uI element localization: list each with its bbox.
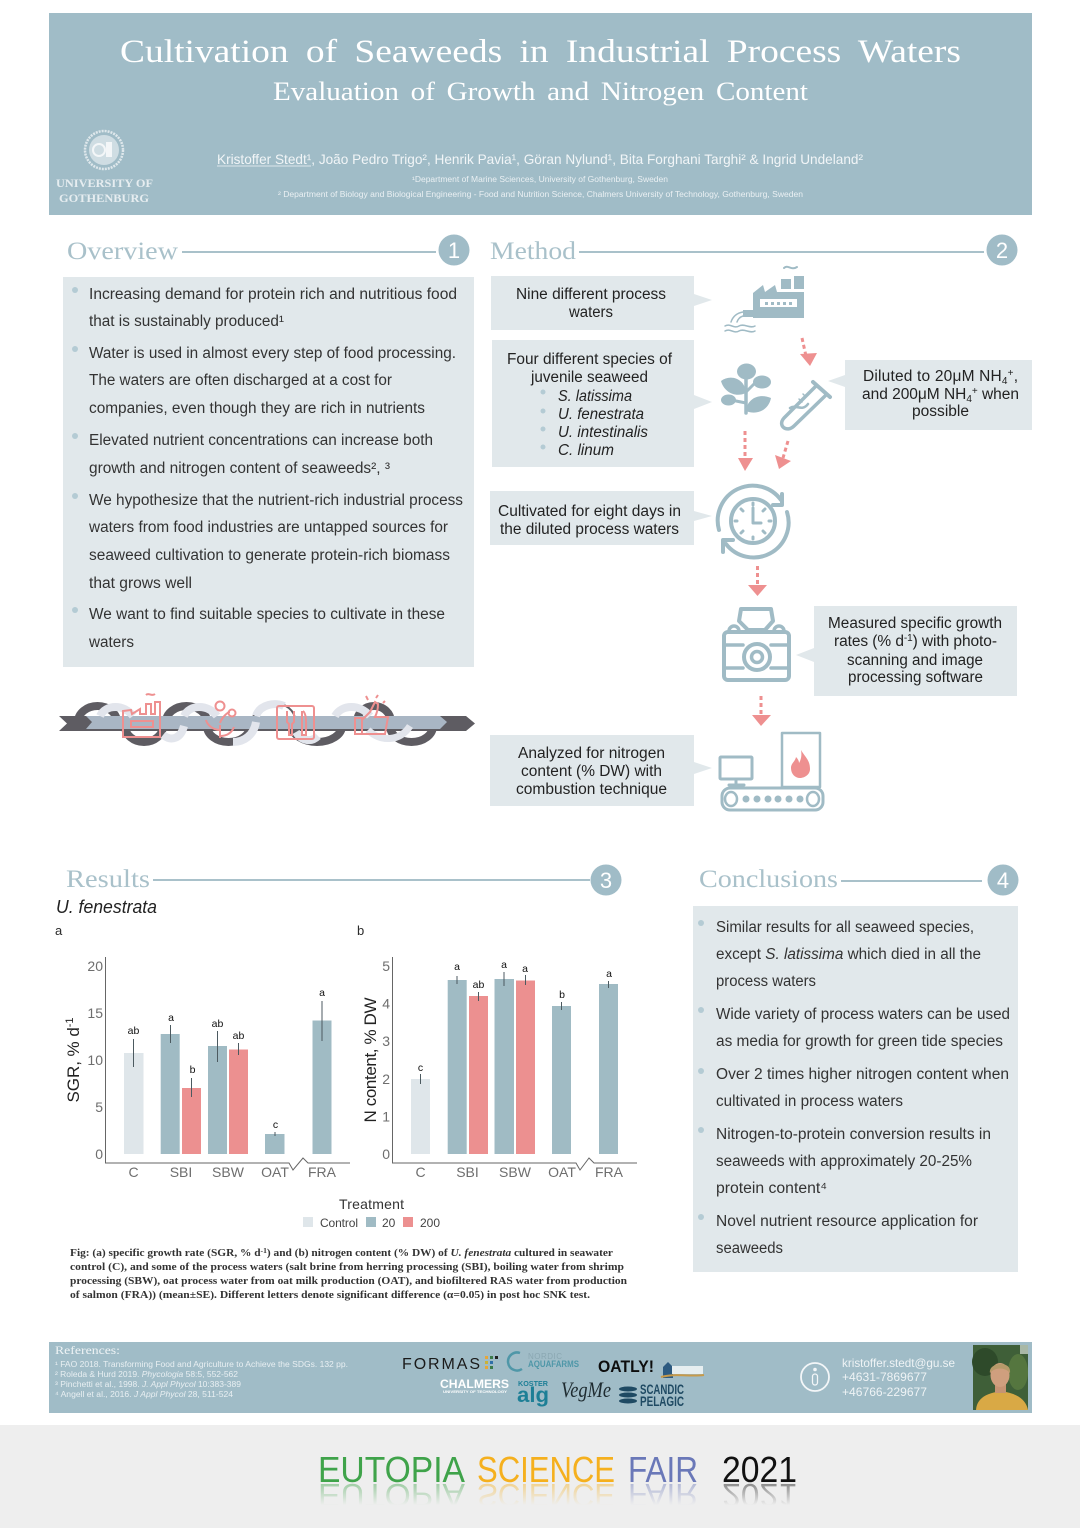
panel: overview: companies, even though they are rich in nutrients <box>89 400 425 417</box>
panel: overview: that is sustainably produced¹ <box>89 313 284 330</box>
heading: overview <box>67 234 470 266</box>
method box: species: U. intestinalis <box>558 424 648 441</box>
panel: overview: Elevated nutrient concentrations can increase both <box>89 432 433 449</box>
heading: method: Method <box>490 238 577 265</box>
arrow: factory to tube <box>800 338 817 366</box>
chart b: nitrogen content: b <box>559 989 565 1001</box>
event title: 2021 <box>722 1449 797 1490</box>
panel: overview: Water is used in almost every step of food processing. <box>89 345 456 362</box>
chart a: specific growth rate: c <box>273 1119 278 1131</box>
figure caption: of salmon (FRA)) (mean±SE). Different letters denote significant difference (α=0.05) in post hoc SNK test. <box>70 1290 590 1301</box>
figure caption: ) and (b) nitrogen content (% DW) of <box>267 1248 451 1259</box>
chart a: specific growth rate: ab <box>128 1025 139 1037</box>
chart b: nitrogen content: 5 <box>382 958 390 974</box>
icon: factory with outflow <box>725 267 804 332</box>
figure caption: processing (SBW), oat process water from oat milk production (OAT), and biofiltered RAS water from production <box>70 1276 627 1287</box>
panel: overview: growth and nitrogen content of seaweeds², ³ <box>89 460 390 477</box>
references: ⁴ Angell et al., 2016. J Appl Phycol 28, 511-524 <box>55 1390 234 1399</box>
chart a: specific growth rate: ab <box>212 1018 223 1030</box>
partner logos: CHALMERS <box>440 1377 509 1391</box>
method box: growth rates: -1 <box>904 633 913 644</box>
chart legend <box>303 1196 440 1230</box>
panel: overview: Increasing demand for protein rich and nutritious food <box>89 286 457 303</box>
university logo <box>56 131 153 205</box>
panel: overview: We hypothesize that the nutrient-rich industrial process <box>89 492 463 509</box>
heading: overview: 1 <box>448 238 460 263</box>
chart a: specific growth rate: 0 <box>95 1146 103 1162</box>
chart a: specific growth rate: 15 <box>87 1005 103 1021</box>
panel: conclusions: seaweeds <box>716 1240 783 1257</box>
chart a: specific growth rate: SBI <box>170 1164 192 1180</box>
panel: conclusions: process waters <box>716 973 816 990</box>
university logo: UNIVERSITY OF <box>56 176 153 190</box>
figure caption: Fig: (a) specific growth rate (SGR, % d <box>70 1248 246 1259</box>
header banner <box>49 13 1032 215</box>
heading: conclusions: Conclusions <box>699 866 838 893</box>
chart b: nitrogen content: a <box>454 961 460 973</box>
event title: EUTOPIA <box>318 1476 465 1512</box>
subtitle: Evaluation of Growth and Nitrogen Content <box>273 77 809 106</box>
chart legend: 20 <box>382 1216 396 1230</box>
panel: conclusions: as media for growth for green tide species <box>716 1033 1003 1050</box>
method box: nitrogen analysis: combustion technique <box>516 781 667 798</box>
panel: overview: that grows well <box>89 575 192 592</box>
method box: growth rates: processing software <box>848 669 983 686</box>
chart legend: Control <box>320 1216 358 1230</box>
references: ² Roleda & Hurd 2019. Phycologia 58:5, 552-562 <box>55 1370 239 1379</box>
footer bar <box>49 1342 1032 1413</box>
chart b: nitrogen content: b <box>357 923 364 938</box>
chart a: specific growth rate: 10 <box>87 1052 103 1068</box>
panel: conclusions: Nitrogen-to-protein conversion results in <box>716 1126 991 1143</box>
references <box>55 1343 348 1399</box>
method box: nitrogen analysis: Analyzed for nitrogen <box>518 745 665 762</box>
panel: overview <box>63 277 474 667</box>
event title: FAIR <box>628 1449 698 1490</box>
method box: dilution: , <box>1014 368 1018 385</box>
panel: conclusions: protein content⁴ <box>716 1180 827 1197</box>
method box: growth rates: scanning and image <box>847 652 983 669</box>
panel: conclusions: except S. latissima which died in all the <box>716 946 981 963</box>
chart a: specific growth rate: 5 <box>95 1099 103 1115</box>
panel: conclusions: Over 2 times higher nitrogen content when <box>716 1066 1009 1083</box>
chart b: nitrogen content: a <box>606 968 612 980</box>
partner logos: KOSTER <box>518 1381 548 1388</box>
event title: 2021 <box>722 1476 797 1512</box>
contact details: kristoffer.stedt@gu.se <box>842 1356 955 1370</box>
chart b: nitrogen content: 3 <box>382 1033 390 1049</box>
method box: species: S. latissima <box>558 388 632 405</box>
chart a: specific growth rate: a <box>319 987 325 999</box>
icon: clock cycle <box>718 486 789 557</box>
chart a: specific growth rate: -1 <box>64 1018 76 1027</box>
panel: conclusions: Wide variety of process waters can be used <box>716 1006 1010 1023</box>
bottom band <box>0 1425 1080 1528</box>
chart a: specific growth rate: a <box>168 1012 174 1024</box>
method box: growth rates <box>796 606 1017 696</box>
arrow: camera to analyser <box>752 696 771 726</box>
figure caption: -1 <box>261 1247 267 1255</box>
chart b: nitrogen content: FRA <box>595 1164 624 1180</box>
university logo: GOTHENBURG <box>59 191 149 205</box>
partner logos: VegMe <box>561 1377 611 1402</box>
panel: overview: The waters are often discharged at a cost for <box>89 372 392 389</box>
heading: results: Results <box>66 866 150 893</box>
chart b: nitrogen content: OAT <box>548 1164 576 1180</box>
heading: method: 2 <box>996 238 1008 263</box>
heading: overview: Overview <box>67 238 178 265</box>
chart a: specific growth rate: OAT <box>261 1164 289 1180</box>
chart b: nitrogen content <box>357 923 637 1180</box>
affiliation 2: ² Department of Biology and Biological Engineering - Food and Nutrition Science, Chalmers University of Technology, Gothenburg, Sweden <box>278 190 803 199</box>
method box: species: U. fenestrata <box>558 406 644 423</box>
event title: SCIENCE <box>477 1449 615 1490</box>
icon: camera <box>724 609 789 680</box>
panel: overview: We want to find suitable species to cultivate in these <box>89 606 445 623</box>
partner logos: UNIVERSITY OF TECHNOLOGY <box>443 1389 507 1394</box>
contact details: +4631-7869677 <box>842 1370 927 1384</box>
event title: SCIENCE <box>477 1476 615 1512</box>
icon: info <box>801 1363 829 1391</box>
chart b: nitrogen content: C <box>415 1164 426 1180</box>
chart a: specific growth rate: SBW <box>212 1164 245 1180</box>
partner logos: alg <box>517 1384 549 1407</box>
chain illustration <box>59 703 475 742</box>
panel: overview: seaweed cultivation to generate protein-rich biomass <box>89 547 450 564</box>
arrow: tube to clock <box>775 441 791 469</box>
method box: species: C. linum <box>558 442 614 459</box>
method box: dilution: 4 <box>966 394 972 405</box>
method box: species: juvenile seaweed <box>530 369 648 386</box>
panel: overview: waters from food industries are untapped sources for <box>88 519 448 536</box>
panel: conclusions <box>693 906 1018 1272</box>
chart b: nitrogen content: N content, % DW <box>361 998 380 1122</box>
chart a: specific growth rate: b <box>190 1064 196 1076</box>
title: Cultivation of Seaweeds in Industrial Process Waters <box>120 34 961 70</box>
method box: cultivation: the diluted process waters <box>500 521 679 538</box>
method box: dilution: 4 <box>1002 376 1008 387</box>
heading: results: 3 <box>600 868 612 893</box>
icon row: factory, plant, food, thumbs up <box>123 694 388 739</box>
chart a: specific growth rate <box>55 923 350 1180</box>
chart a: specific growth rate: FRA <box>308 1164 337 1180</box>
method box: nitrogen analysis <box>490 735 712 806</box>
chart a: specific growth rate: 20 <box>87 958 103 974</box>
method box: growth rates: rates (% d <box>834 633 904 650</box>
chart b: nitrogen content: 1 <box>382 1108 390 1124</box>
event title: FAIR <box>628 1476 698 1512</box>
references: ³ Pinchetti et al., 1998. J. Appl Phycol 10:383-389 <box>55 1380 242 1389</box>
method box: cultivation: Cultivated for eight days in <box>498 503 681 520</box>
icon: combustion analyser <box>720 733 823 810</box>
method box: dilution: when <box>978 386 1019 403</box>
method box: dilution <box>828 360 1032 430</box>
partner logos: SCANDIC <box>640 1381 684 1397</box>
method box: dilution: possible <box>912 403 969 420</box>
method box: species <box>492 340 712 467</box>
chart legend: 200 <box>420 1216 440 1230</box>
heading: method <box>490 234 1018 266</box>
method box: cultivation <box>490 491 712 545</box>
method box: dilution: Diluted to 20μM NH <box>863 368 1002 385</box>
species label: U. fenestrata <box>56 897 157 917</box>
icon: test tube <box>782 382 830 429</box>
event title <box>318 1449 797 1512</box>
heading: conclusions <box>699 864 1018 896</box>
method box: dilution: and 200μM NH <box>862 386 966 403</box>
figure caption: control (C), and some of the process waters (salt brine from herring processing (SBI), boiling water from shrimp <box>70 1262 624 1273</box>
partner logos: PELAGIC <box>640 1393 684 1409</box>
arrow: clock to camera <box>748 566 767 596</box>
method box: species: Four different species of <box>507 351 673 368</box>
chart b: nitrogen content: c <box>418 1062 423 1074</box>
chart b: nitrogen content: SBW <box>499 1164 532 1180</box>
contact details: +46766-229677 <box>842 1385 927 1399</box>
heading: results <box>66 864 622 896</box>
method box: process waters <box>491 276 712 330</box>
references: References: <box>55 1343 120 1357</box>
chart b: nitrogen content: 2 <box>382 1071 390 1087</box>
affiliation 1: ¹Department of Marine Sciences, University of Gothenburg, Sweden <box>412 175 668 184</box>
portrait photo <box>972 1345 1028 1410</box>
figure caption <box>70 1247 627 1301</box>
partner logos: FORMAS <box>402 1356 480 1373</box>
partner logos: AQUAFARMS <box>528 1359 579 1369</box>
panel: conclusions: seaweeds with approximately 20-25% <box>716 1153 972 1170</box>
partner logos: NORDIC <box>528 1352 562 1361</box>
method box: dilution: + <box>972 386 978 397</box>
panel: conclusions: cultivated in process waters <box>716 1093 903 1110</box>
figure caption: U. fenestrata cultured in seawater <box>451 1248 605 1259</box>
chart legend: Treatment <box>339 1196 404 1212</box>
contact details <box>842 1356 955 1399</box>
panel: conclusions: Novel nutrient resource application for <box>716 1213 978 1230</box>
event title: EUTOPIA <box>318 1449 465 1490</box>
authors: Kristoffer Stedt¹, João Pedro Trigo², Henrik Pavia¹, Göran Nylund¹, Bita Forghani Targhi² & Ingrid Undeland² <box>217 151 863 167</box>
method box: nitrogen analysis: content (% DW) with <box>521 763 662 780</box>
references: ¹ FAO 2018. Transforming Food and Agriculture to Achieve the SDGs. 132 pp. <box>55 1360 348 1369</box>
icon: seaweed plant <box>721 364 771 413</box>
method box: dilution: + <box>1008 368 1014 379</box>
method box: process waters: Nine different process <box>516 286 666 303</box>
partner logos <box>402 1352 704 1409</box>
heading: conclusions: 4 <box>997 868 1009 893</box>
method box: growth rates: Measured specific growth <box>828 615 1002 632</box>
chart b: nitrogen content: SBI <box>456 1164 479 1180</box>
chart a: specific growth rate: SGR, % d <box>64 1027 83 1102</box>
chart a: specific growth rate: a <box>55 923 63 938</box>
chart b: nitrogen content: a <box>501 959 507 971</box>
method box: process waters: waters <box>568 304 613 321</box>
chart b: nitrogen content: 4 <box>382 996 390 1012</box>
panel: conclusions: Similar results for all seaweed species, <box>716 919 974 936</box>
partner logos: OATLY! <box>598 1357 654 1376</box>
chart b: nitrogen content: 0 <box>382 1146 390 1162</box>
chart b: nitrogen content: ab <box>473 979 484 991</box>
arrow: plant to clock <box>738 431 753 471</box>
chart a: specific growth rate: ab <box>233 1030 244 1042</box>
panel: overview: waters <box>88 634 134 651</box>
chart a: specific growth rate: C <box>128 1164 139 1180</box>
method box: growth rates: ) with photo- <box>913 633 997 650</box>
chart b: nitrogen content: a <box>522 963 528 975</box>
